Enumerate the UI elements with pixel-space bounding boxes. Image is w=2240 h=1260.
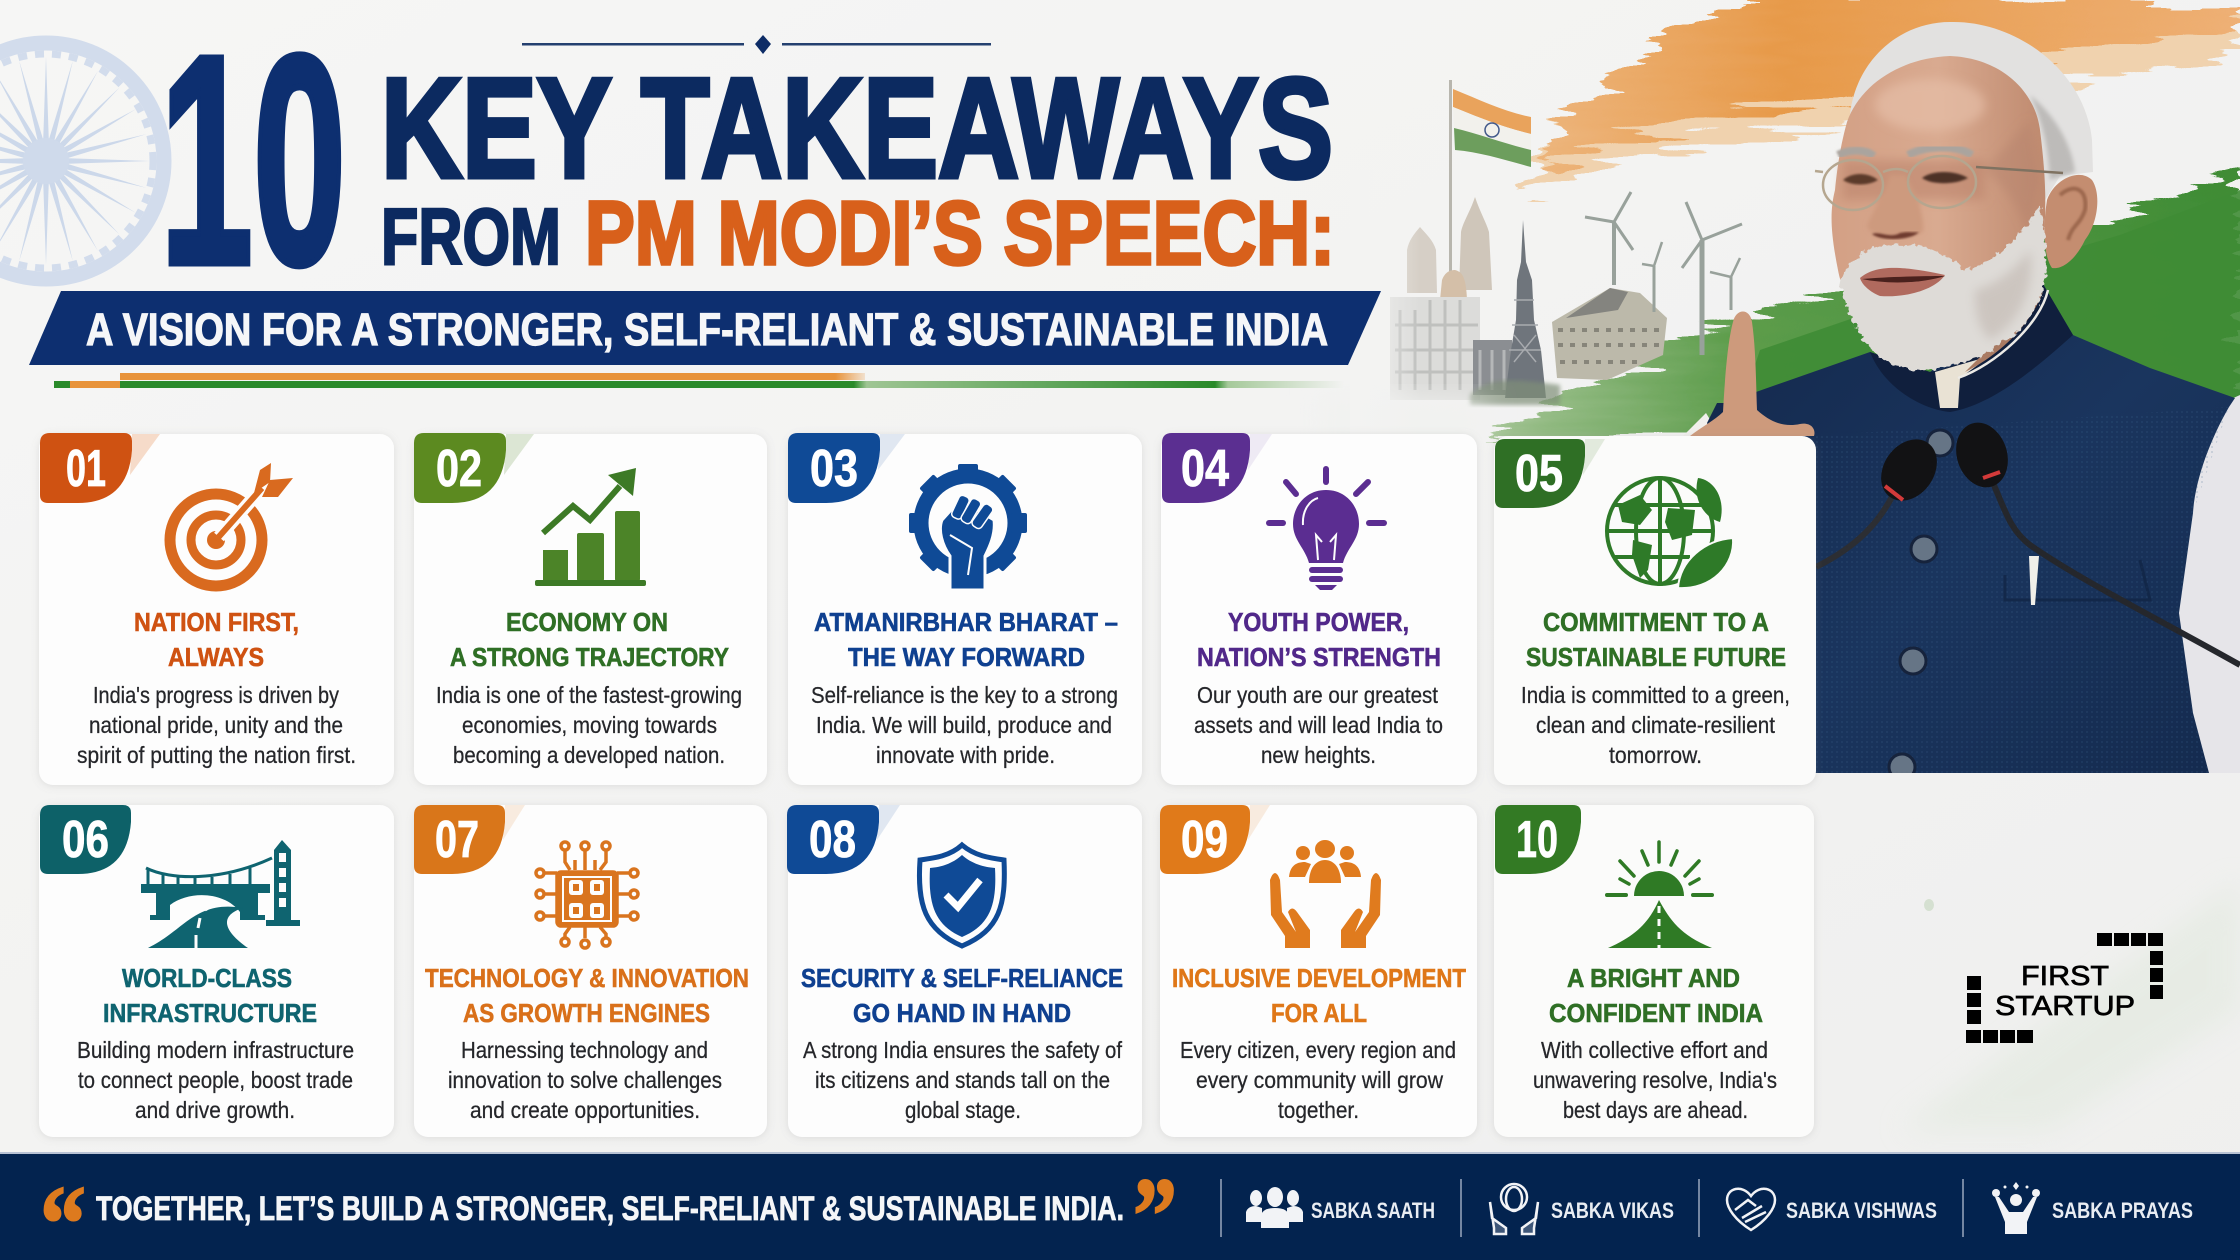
icon: bridge and road xyxy=(141,840,300,948)
body text: India. We will build, produce and xyxy=(816,712,1112,738)
badge 08 xyxy=(787,805,900,874)
icon: hands holding people xyxy=(1270,840,1381,948)
body text: economies, moving towards xyxy=(462,712,717,738)
dome tower left xyxy=(1407,227,1437,293)
card surface xyxy=(39,434,394,785)
card 01 xyxy=(39,433,394,785)
heading xyxy=(103,963,317,1028)
badge 06 xyxy=(40,805,131,874)
heading: SECURITY & SELF-RELIANCE xyxy=(801,963,1123,993)
face xyxy=(1832,56,2046,290)
title: key takeaways: KEY TAKEAWAYS xyxy=(381,49,1333,208)
subtitle banner xyxy=(29,291,1381,365)
dark pavilion xyxy=(1473,340,1512,395)
footer band xyxy=(0,1152,2240,1260)
card 02 xyxy=(414,433,767,785)
heading: SUSTAINABLE FUTURE xyxy=(1526,642,1786,672)
kurta sleeve xyxy=(2179,395,2240,773)
icon: growth chart xyxy=(535,468,646,586)
body text: Self-reliance is the key to a strong xyxy=(811,682,1118,708)
sabka prayas: SABKA PRAYAS xyxy=(2052,1198,2193,1223)
card surface xyxy=(1494,436,1816,785)
heading: GO HAND IN HAND xyxy=(853,998,1071,1028)
heading xyxy=(1197,607,1441,672)
body text: best days are ahead. xyxy=(1563,1097,1748,1123)
sabka vishwas xyxy=(1727,1189,1937,1230)
heading xyxy=(425,963,749,1028)
body text: Harnessing technology and xyxy=(461,1037,708,1063)
heading xyxy=(814,607,1118,672)
portrait illustration of speaker xyxy=(1683,22,2240,780)
badge 08: 08 xyxy=(809,811,856,869)
body text: clean and climate-resilient xyxy=(1536,712,1776,738)
vest weave texture xyxy=(1816,407,2229,773)
card surface xyxy=(788,434,1142,785)
tricolour stripes xyxy=(54,373,1344,388)
card surface xyxy=(1160,805,1477,1137)
glasses xyxy=(1815,156,2063,210)
clock tower xyxy=(1459,197,1492,290)
title: from: FROM xyxy=(381,192,561,281)
body text: becoming a developed nation. xyxy=(453,742,725,768)
body text xyxy=(77,682,356,768)
body text: India is one of the fastest-growing xyxy=(436,682,742,708)
shirt cuff behind hand xyxy=(1686,413,1710,432)
card 05 xyxy=(1494,436,1816,785)
card 07 xyxy=(414,805,767,1137)
subtitle banner: A VISION FOR A STRONGER, SELF-RELIANT & SUSTAINABLE INDIA xyxy=(86,304,1328,355)
pen xyxy=(2029,556,2039,605)
body text xyxy=(448,1037,722,1123)
body text: global stage. xyxy=(905,1097,1021,1123)
body text: India is committed to a green, xyxy=(1521,682,1790,708)
badge 04 xyxy=(1162,433,1272,503)
skyline left fade xyxy=(1350,170,1420,440)
card surface xyxy=(1494,805,1814,1137)
pocket xyxy=(2005,560,2150,600)
pale orange under-stroke xyxy=(1520,20,2240,195)
collar piping xyxy=(1958,290,2048,378)
buttons xyxy=(1889,430,1953,780)
colonial building xyxy=(1552,288,1667,380)
sabka prayas xyxy=(1992,1182,2193,1234)
card 06 xyxy=(39,805,394,1137)
sabka saath: SABKA SAATH xyxy=(1311,1198,1435,1223)
badge 03 xyxy=(788,433,905,503)
body text: national pride, unity and the xyxy=(89,712,343,738)
city skyline and turbines xyxy=(1390,192,1742,405)
body text: innovation to solve challenges xyxy=(448,1067,722,1093)
card 10 xyxy=(1494,805,1814,1137)
microphone right xyxy=(1948,416,2240,665)
body text: its citizens and stands tall on the xyxy=(815,1067,1110,1093)
vest collar xyxy=(1870,284,2073,412)
ear xyxy=(2044,175,2097,268)
heading: A BRIGHT AND xyxy=(1567,963,1740,993)
icon: sunrise over road xyxy=(1605,842,1714,948)
heading: AS GROWTH ENGINES xyxy=(463,998,710,1028)
body text: every community will grow xyxy=(1196,1067,1443,1093)
body text: new heights. xyxy=(1261,742,1376,768)
badge 01: 01 xyxy=(66,440,106,498)
national flag on pole xyxy=(1449,80,1531,290)
heading: CONFIDENT INDIA xyxy=(1549,998,1763,1028)
body text: Every citizen, every region and xyxy=(1180,1037,1456,1063)
sabka vikas: SABKA VIKAS xyxy=(1551,1198,1674,1223)
title: pm modi's speech: PM MODI’S SPEECH: xyxy=(585,184,1335,284)
spire tower xyxy=(1505,220,1546,398)
neck shirt collar xyxy=(1935,360,1980,408)
body text xyxy=(1521,682,1790,768)
badge 01 xyxy=(40,433,160,503)
nose xyxy=(1869,190,1923,234)
green dot xyxy=(1924,899,1934,911)
body text: India's progress is driven by xyxy=(93,682,339,708)
first startup logo: FIRST xyxy=(2021,960,2109,991)
badge 10: 10 xyxy=(1516,811,1558,869)
heading: INCLUSIVE DEVELOPMENT xyxy=(1172,963,1466,993)
mouth xyxy=(1860,268,1945,296)
body text: unwavering resolve, India's xyxy=(1533,1067,1777,1093)
heading xyxy=(1526,607,1786,672)
face shading xyxy=(1836,79,2020,202)
heading: INFRASTRUCTURE xyxy=(103,998,317,1028)
card surface xyxy=(1161,434,1477,785)
hair xyxy=(1850,22,2093,205)
heading: A STRONG TRAJECTORY xyxy=(450,642,729,672)
heading: YOUTH POWER, xyxy=(1228,607,1409,637)
icon: globe with leaves xyxy=(1607,478,1733,588)
body text: Our youth are our greatest xyxy=(1197,682,1439,708)
badge 09 xyxy=(1160,805,1270,874)
card surface xyxy=(414,434,767,785)
icon: microchip xyxy=(536,842,638,948)
badge 05 xyxy=(1495,439,1605,508)
beard shading xyxy=(1975,250,2031,340)
card 09 xyxy=(1160,805,1477,1137)
solid green right xyxy=(1730,190,2240,440)
badge 06: 06 xyxy=(62,811,109,869)
badge 09: 09 xyxy=(1181,811,1228,869)
green brush xyxy=(1480,170,2240,440)
heading: THE WAY FORWARD xyxy=(848,642,1085,672)
heading: COMMITMENT TO A xyxy=(1543,607,1769,637)
heading xyxy=(134,607,299,672)
first startup logo: STARTUP xyxy=(1995,990,2135,1021)
divider lines xyxy=(1221,1179,1963,1237)
body text xyxy=(803,1037,1123,1123)
sabka vishwas: SABKA VISHWAS xyxy=(1786,1198,1937,1223)
heading xyxy=(801,963,1123,1028)
heading: ECONOMY ON xyxy=(506,607,668,637)
body text: and create opportunities. xyxy=(470,1097,700,1123)
vest xyxy=(1740,284,2235,773)
card surface xyxy=(39,805,394,1137)
body text: innovate with pride. xyxy=(876,742,1055,768)
heading xyxy=(450,607,729,672)
heading: FOR ALL xyxy=(1271,998,1367,1028)
heading: NATION’S STRENGTH xyxy=(1197,642,1441,672)
card surface xyxy=(414,805,767,1137)
title ornament xyxy=(522,35,991,54)
badge 10 xyxy=(1495,805,1581,874)
card surface xyxy=(788,805,1142,1137)
tricolour brush background xyxy=(1480,0,2240,440)
turbines xyxy=(1585,192,1742,355)
heading xyxy=(1549,963,1763,1028)
hair shadow xyxy=(2030,95,2075,180)
body text: assets and will lead India to xyxy=(1194,712,1443,738)
badge 02 xyxy=(414,433,534,503)
body text: tomorrow. xyxy=(1609,742,1702,768)
sabka saath xyxy=(1246,1187,1435,1228)
sabka vikas xyxy=(1490,1184,1674,1234)
trees in front of city xyxy=(1470,381,1560,405)
icon: target with arrow xyxy=(170,463,293,586)
body text xyxy=(1533,1037,1777,1123)
raised finger and hand xyxy=(1690,312,1814,436)
card 04 xyxy=(1161,433,1477,785)
body text xyxy=(77,1037,354,1123)
mid dome xyxy=(1440,270,1467,300)
body text xyxy=(436,682,742,768)
badge 02: 02 xyxy=(436,440,482,498)
ashoka chakra watermark xyxy=(0,43,164,279)
badge 05: 05 xyxy=(1515,445,1563,503)
eyes xyxy=(1843,172,1968,184)
badge 04: 04 xyxy=(1181,440,1229,498)
faint green brush lower right xyxy=(1900,880,2240,1130)
icon: gear and fist xyxy=(909,464,1027,590)
body text: spirit of putting the nation first. xyxy=(77,742,356,768)
neck skin xyxy=(1965,292,2043,372)
microphone left xyxy=(1816,439,1937,570)
body text xyxy=(1180,1037,1456,1123)
body text: together. xyxy=(1278,1097,1359,1123)
body text: With collective effort and xyxy=(1541,1037,1768,1063)
lower palace mass xyxy=(1390,297,1480,400)
body text xyxy=(811,682,1118,768)
heading: NATION FIRST, xyxy=(134,607,299,637)
badge 07: 07 xyxy=(435,811,479,869)
body text: to connect people, boost trade xyxy=(78,1067,353,1093)
body text: Building modern infrastructure xyxy=(77,1037,354,1063)
heading: TECHNOLOGY & INNOVATION xyxy=(425,963,749,993)
icon: shield with check xyxy=(919,845,1004,946)
heading: ALWAYS xyxy=(168,642,264,672)
badge 03: 03 xyxy=(810,440,858,498)
heading xyxy=(1172,963,1466,1028)
eyebrows xyxy=(1838,147,1972,156)
card 03 xyxy=(788,433,1142,785)
heading: WORLD-CLASS xyxy=(122,963,292,993)
beard xyxy=(1840,205,2046,370)
skyline ground fade xyxy=(1320,395,1490,450)
body text: and drive growth. xyxy=(135,1097,295,1123)
heading: ATMANIRBHAR BHARAT – xyxy=(814,607,1118,637)
vest beside finger xyxy=(1707,403,1724,424)
orange brush xyxy=(1540,0,2240,170)
title number 10: 10 xyxy=(160,0,346,327)
first startup logo xyxy=(1966,933,2163,1043)
icon: lightbulb xyxy=(1269,469,1384,590)
footer message: TOGETHER, LET’S BUILD A STRONGER, SELF-RELIANT & SUSTAINABLE INDIA. xyxy=(96,1190,1124,1228)
card 08 xyxy=(787,805,1142,1137)
badge 07 xyxy=(414,805,525,874)
body text xyxy=(1194,682,1443,768)
body text: A strong India ensures the safety of xyxy=(803,1037,1123,1063)
